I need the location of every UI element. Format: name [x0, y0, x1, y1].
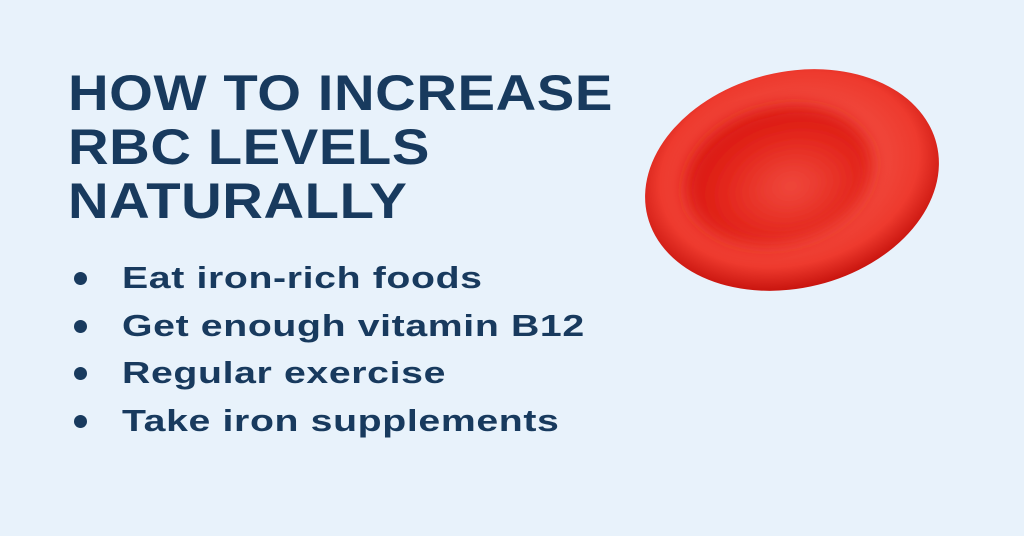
bullet list — [74, 260, 585, 438]
title: RBC LEVELS — [68, 119, 430, 175]
title: NATURALLY — [68, 173, 407, 229]
bullet: supplements — [74, 402, 559, 438]
text: Eat iron-rich foods — [122, 260, 483, 295]
text: Take iron supplements — [122, 402, 559, 438]
text: Get enough vitamin B12 — [122, 308, 585, 342]
bullet: vitamin B12 — [74, 308, 585, 342]
title — [68, 65, 613, 229]
bullet: iron-rich foods — [74, 260, 483, 295]
title: HOW TO INCREASE — [68, 65, 613, 121]
bullet: exercise — [74, 355, 446, 390]
text: Regular exercise — [122, 355, 446, 390]
